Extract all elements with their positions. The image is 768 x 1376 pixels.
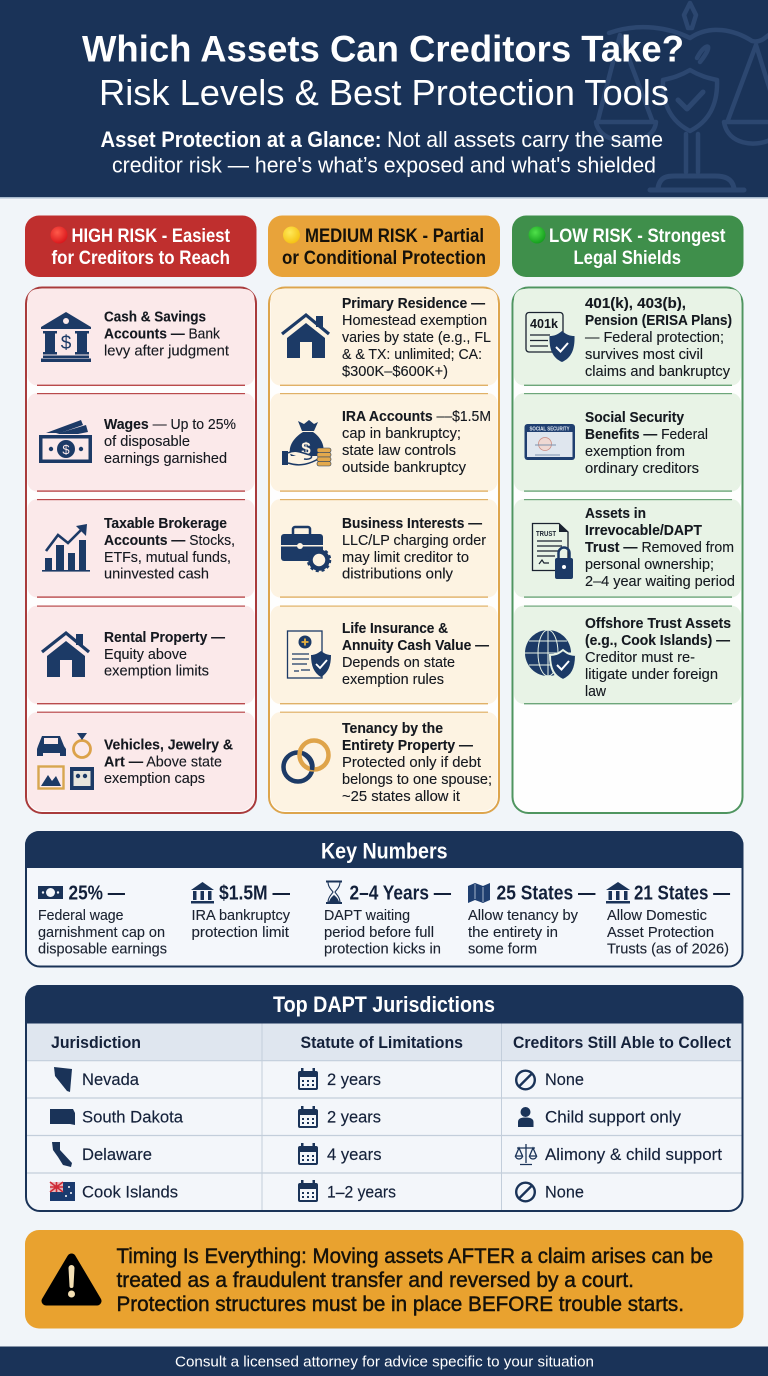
stat: 25 states: some form: [468, 942, 537, 958]
table header row: [27, 1024, 742, 1060]
icon: money bag in hand: [282, 420, 331, 466]
text: offshore trust: (e.g., Cook Islands) —: [585, 633, 730, 649]
footer: Consult a licensed attorney for advice specific to your situation: [175, 1354, 594, 1370]
text: irrevocable trust: Assets in: [585, 506, 646, 522]
card: 401k: [514, 289, 741, 386]
icon: bank: $: [61, 333, 72, 354]
icon: policy document with shield: [288, 631, 331, 678]
text: IRA accounts: state law controls: [342, 443, 456, 459]
panel: low risk assets: [512, 288, 742, 813]
icon: cash bills: [39, 420, 92, 463]
text: wages: Wages — Up to 25%: [104, 417, 236, 433]
text: rental property: [104, 630, 225, 680]
text: business interests: LLC/LP charging order: [342, 533, 486, 549]
card: social security: [514, 393, 741, 492]
panel: medium risk assets: [269, 288, 499, 813]
icon: briefcase and gear: [281, 527, 330, 571]
stat: 21 states: 21 States —: [634, 882, 730, 904]
text: social security: exemption from: [585, 444, 685, 460]
text: irrevocable trust: Trust — Removed from: [585, 540, 734, 556]
stat: 25 states: the entirety in: [468, 925, 558, 941]
row: Nevada: Nevada: [82, 1070, 140, 1089]
risk header: high: HIGH RISK - Easiest: [72, 225, 230, 247]
icon: Nevada state shape: [54, 1067, 72, 1092]
stat: 25 percent: [38, 882, 167, 958]
text: wages: of disposable: [104, 434, 190, 450]
row: Delaware: Alimony & child support: [545, 1145, 722, 1164]
stat: 25 percent: 25% —: [68, 882, 125, 904]
text: vehicles jewelry art: exemption caps: [104, 771, 205, 787]
text: tenancy by the entirety: Entirety Property —: [342, 738, 473, 754]
text: brokerage: uninvested cash: [104, 566, 209, 582]
stat: 25 states: Allow tenancy by: [468, 908, 579, 924]
text: rental property: exemption limits: [104, 664, 209, 680]
card: cash and savings: [28, 289, 254, 386]
text: business interests: [342, 516, 486, 582]
text: brokerage: Taxable Brokerage: [104, 516, 227, 532]
heading: key numbers: Key Numbers: [321, 838, 448, 864]
row: Nevada: None: [545, 1070, 584, 1089]
text: tenancy by the entirety: ~25 states allow it: [342, 789, 460, 805]
text: IRA accounts: cap in bankruptcy;: [342, 426, 461, 442]
stat: 21 states: Trusts (as of 2026): [607, 942, 729, 958]
icon: calendar: [298, 1180, 318, 1202]
stat: 2 to 4 years: 2–4 Years —: [350, 882, 451, 904]
row: Cook Islands: 1–2 years: [327, 1182, 396, 1202]
icon: house: [42, 633, 89, 677]
text: primary residence: Homestead exemption: [342, 313, 487, 329]
subtitle: Risk Levels & Best Protection Tools: [99, 72, 669, 113]
icon: South Dakota state shape: [50, 1109, 75, 1125]
text: life insurance: Annuity Cash Value —: [342, 638, 489, 654]
text: irrevocable trust: personal ownership;: [585, 557, 714, 573]
icon: social security card: [524, 424, 575, 460]
icon: social security card: SOCIAL SECURITY: [530, 426, 570, 432]
text: 401k: Pension (ERISA Plans): [585, 313, 732, 329]
intro text: creditor risk — here's what’s exposed and what's shielded: [112, 152, 656, 178]
text: primary residence: Primary Residence —: [342, 296, 485, 312]
row: Delaware: 4 years: [327, 1145, 382, 1164]
row: Nevada: [54, 1067, 584, 1092]
text: primary residence: [342, 296, 491, 380]
row: South Dakota: Child support only: [545, 1108, 681, 1126]
text: primary residence: varies by state (e.g., FL: [342, 330, 491, 346]
text: 401k: 401(k), 403(b),: [585, 296, 686, 312]
text: rental property: Rental Property —: [104, 630, 225, 646]
text: offshore trust: law: [585, 684, 607, 700]
text: cash and savings: Accounts — Bank: [104, 327, 221, 343]
text: social security: Benefits — Federal: [585, 427, 708, 443]
icon: bank: [191, 882, 214, 904]
card: rental property: [28, 606, 254, 704]
text: life insurance: Depends on state: [342, 655, 455, 671]
text: business interests: may limit creditor to: [342, 550, 469, 566]
table header row: Jurisdiction: [51, 1033, 141, 1052]
stat: 25 states: [468, 882, 596, 958]
text: life insurance: [342, 621, 489, 688]
stat: 1.5M: $1.5M —: [219, 882, 290, 904]
stat: 1.5M: protection limit: [192, 925, 289, 941]
text: vehicles jewelry art: Art — Above state: [104, 754, 222, 770]
icon: state shape: [52, 1142, 72, 1167]
stat: 1.5M: [191, 882, 291, 941]
risk header: high: for Creditors to Reach: [52, 247, 230, 269]
text: wages: [104, 417, 236, 467]
stat: 21 states: Allow Domestic: [607, 908, 707, 924]
intro text: [100, 127, 663, 178]
icon: bank: [606, 882, 630, 904]
text: cash and savings: levy after judgment: [104, 344, 229, 360]
text: offshore trust: [585, 616, 731, 700]
text: 401k: — Federal protection;: [585, 330, 724, 346]
row: Cook Islands: [50, 1180, 584, 1202]
table header row: Creditors Still Able to Collect: [513, 1033, 731, 1052]
text: business interests: distributions only: [342, 566, 454, 582]
icon: calendar: [298, 1068, 318, 1090]
text: irrevocable trust: 2–4 year waiting period: [585, 574, 735, 590]
title: Which Assets Can Creditors Take?: [82, 28, 684, 70]
text: wages: earnings garnished: [104, 451, 227, 467]
text: 401k: claims and bankruptcy: [585, 364, 731, 380]
text: timing warning: Timing Is Everything: Moving assets AFTER a claim arises can be: [116, 1245, 713, 1268]
icon: child support person: [518, 1107, 534, 1127]
text: cash and savings: Cash & Savings: [104, 310, 206, 326]
text: social security: [585, 410, 708, 477]
stat: 25 percent: disposable earnings: [38, 942, 167, 958]
icon: money bag in hand: $: [301, 439, 311, 458]
card: brokerage: [28, 499, 254, 598]
panel: top DAPT jurisdictions table: [25, 985, 744, 1211]
text: primary residence: $300K–$600K+): [342, 364, 448, 380]
risk header: medium: [268, 216, 500, 277]
card: tenancy by the entirety: [270, 712, 498, 811]
stat: 1.5M: IRA bankruptcy: [192, 908, 291, 924]
icon: 401k document with shield: 401k: [530, 317, 558, 331]
text: tenancy by the entirety: Protected only if debt: [342, 755, 481, 771]
text: vehicles jewelry art: [104, 738, 234, 787]
card: IRA accounts: [270, 393, 498, 492]
icon: calendar: [298, 1106, 318, 1128]
text: life insurance: exemption rules: [342, 672, 444, 688]
icon: bank: [41, 312, 91, 362]
row: Delaware: [52, 1142, 722, 1167]
heading: key numbers: [25, 831, 744, 868]
footer: [0, 1346, 768, 1376]
text: 401k: [585, 296, 732, 380]
text: irrevocable trust: Irrevocable/DAPT: [585, 523, 702, 539]
card: primary residence: [270, 289, 498, 386]
risk header: low: [512, 216, 744, 277]
icon: growth chart: [42, 524, 90, 572]
icon: trust document with lock: [532, 524, 573, 579]
text: offshore trust: Creditor must re-: [585, 650, 695, 666]
stat: 25 states: 25 States —: [496, 882, 596, 904]
row: South Dakota: [50, 1106, 681, 1128]
text: 401k: survives most civil: [585, 347, 703, 363]
text: timing warning: [116, 1245, 713, 1316]
card: life insurance: [270, 606, 498, 704]
card: business interests: [270, 499, 498, 598]
callout: timing warning: [25, 1230, 744, 1328]
text: social security: Social Security: [585, 410, 684, 426]
icon: car ring and art: [37, 733, 94, 790]
text: life insurance: Life Insurance &: [342, 621, 448, 637]
text: vehicles jewelry art: Vehicles, Jewelry &: [104, 738, 234, 754]
risk header: medium: or Conditional Protection: [282, 247, 486, 269]
text: brokerage: Accounts — Stocks,: [104, 533, 235, 549]
table header row: Statute of Limitations: [300, 1033, 463, 1052]
icon: 401k document with shield: [526, 312, 575, 362]
stat: 2 to 4 years: DAPT waiting: [324, 908, 410, 924]
icon: scales of justice watermark: [596, 3, 768, 190]
text: IRA accounts: [342, 409, 491, 476]
text: IRA accounts: IRA Accounts ––$1.5M: [342, 409, 491, 425]
text: rental property: Equity above: [104, 647, 187, 663]
risk header: high: [25, 216, 256, 277]
icon: map: [468, 883, 490, 903]
icon: none symbol: [516, 1183, 535, 1201]
risk header: low: Legal Shields: [574, 247, 681, 269]
panel: high risk assets: [26, 288, 256, 813]
risk header: low: LOW RISK - Strongest: [549, 225, 726, 247]
stat: 25 percent: garnishment cap on: [38, 925, 165, 941]
card: vehicles jewelry art: [28, 712, 254, 811]
icon: cash bills: $: [62, 442, 70, 457]
text: business interests: Business Interests —: [342, 516, 482, 532]
stat: 2 to 4 years: period before full: [324, 925, 434, 941]
text: irrevocable trust: [585, 506, 735, 590]
icon: warning triangle: [46, 1258, 97, 1301]
icon: linked rings: [284, 740, 328, 782]
header banner: [0, 0, 768, 198]
text: primary residence: & & TX: unlimited; CA:: [342, 347, 482, 363]
row: South Dakota: 2 years: [327, 1108, 381, 1126]
text: cash and savings: [104, 310, 229, 360]
icon: trust document with lock: TRUST: [536, 531, 557, 538]
risk header: medium: MEDIUM RISK - Partial: [305, 225, 484, 247]
icon: globe with shield: [525, 630, 576, 680]
row: Cook Islands: None: [545, 1182, 584, 1202]
intro text: Asset Protection at a Glance:: [100, 127, 382, 152]
text: timing warning: Protection structures must be in place BEFORE trouble starts.: [116, 1293, 684, 1316]
row: Cook Islands: Cook Islands: [82, 1182, 178, 1202]
row: Delaware: Delaware: [82, 1145, 152, 1164]
intro text: Not all assets carry the same: [387, 127, 663, 152]
stat: 21 states: Asset Protection: [607, 925, 714, 941]
card: irrevocable trust: [514, 499, 741, 598]
card: offshore trust: [514, 606, 741, 704]
text: timing warning: treated as a fraudulent transfer and reversed by a court.: [116, 1269, 634, 1292]
text: brokerage: ETFs, mutual funds,: [104, 550, 231, 566]
text: tenancy by the entirety: belongs to one spouse;: [342, 772, 492, 788]
card: wages: [28, 393, 254, 492]
stat: 25 percent: Federal wage: [38, 908, 124, 924]
text: tenancy by the entirety: [342, 721, 492, 805]
icon: hourglass: [326, 882, 342, 903]
text: IRA accounts: outside bankruptcy: [342, 460, 467, 476]
icon: banknote: [38, 886, 63, 899]
text: offshore trust: litigate under foreign: [585, 667, 718, 683]
text: tenancy by the entirety: Tenancy by the: [342, 721, 443, 737]
row: Nevada: 2 years: [327, 1070, 381, 1089]
stat: 2 to 4 years: protection kicks in: [324, 942, 441, 958]
heading: top DAPT jurisdictions: [25, 985, 744, 1024]
text: social security: ordinary creditors: [585, 461, 699, 477]
row: South Dakota: South Dakota: [82, 1108, 184, 1126]
stat: 2 to 4 years: [324, 882, 451, 958]
text: brokerage: [104, 516, 235, 582]
icon: none symbol: [516, 1071, 535, 1089]
icon: house: [282, 315, 329, 358]
icon: Cook Islands flag: [50, 1182, 75, 1201]
icon: calendar: [298, 1143, 318, 1165]
panel: key numbers: [25, 831, 744, 966]
text: offshore trust: Offshore Trust Assets: [585, 616, 731, 632]
heading: top DAPT jurisdictions: Top DAPT Jurisdictions: [273, 992, 495, 1017]
stat: 21 states: [606, 882, 730, 958]
icon: scales: [516, 1144, 536, 1164]
